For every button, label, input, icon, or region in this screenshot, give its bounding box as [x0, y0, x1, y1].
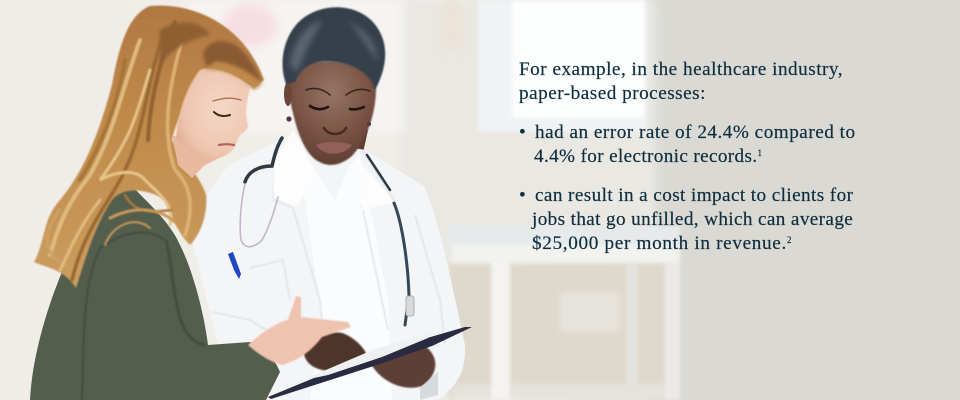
doctor: shirt: [296, 135, 392, 400]
bullet two: •: [519, 185, 526, 206]
doctor: blue pen: [228, 252, 241, 279]
patient: hair strands: [47, 22, 190, 280]
patient: green sweater: [30, 182, 280, 400]
doctor: left collar: [274, 130, 318, 206]
bullet one continuation: 4.4% for electronic records.1: [534, 146, 762, 167]
background: white table: [450, 226, 680, 400]
doctor: face: [288, 61, 376, 165]
patient: sweater shading: [82, 232, 205, 400]
text block: paper-based process facts: [519, 59, 856, 254]
patient: hair mass: [34, 6, 264, 288]
intro text: For example, in the healthcare industry,: [519, 59, 843, 80]
background: bright window: [478, 0, 646, 132]
text block: paper-based process facts: had an error rate of 24.4% compared to: [535, 122, 856, 143]
patient: dark crown and fringe: [160, 22, 262, 90]
doctor: eyes, brows, nose, mouth: [306, 88, 370, 154]
intro text line two: paper-based processes:: [519, 83, 706, 104]
doctor: short curly hair: [283, 7, 385, 90]
background: beige cabinet behind table: [448, 262, 677, 400]
bullet two last line: $25,000 per month in revenue.2: [532, 233, 792, 254]
text block: paper-based process facts: can result in a cost impact to clients for: [535, 185, 853, 206]
patient: [30, 6, 351, 400]
doctor: [193, 7, 465, 400]
clipboard: [268, 327, 472, 399]
doctor: coat folds: [212, 150, 445, 345]
doctor: sleeve: [420, 372, 438, 400]
bullet two: [519, 185, 853, 206]
doctor: white coat: [193, 136, 465, 400]
doctor: ear and earrings: [284, 82, 371, 126]
patient: eye, brow, lips: [213, 98, 241, 145]
bullet one: [519, 122, 856, 143]
doctor: stethoscope: [240, 138, 414, 325]
bullet one: •: [519, 122, 526, 143]
patient: face: [176, 68, 250, 158]
patient: hand: [248, 296, 351, 365]
doctor: right collar: [356, 157, 394, 210]
doctor: neck: [300, 130, 368, 205]
patient: neck: [172, 135, 225, 178]
bullet two continuation: jobs that go unfilled, which can average: [532, 209, 853, 230]
doctor: hands: [304, 332, 368, 371]
background: wall poster: [185, 0, 461, 132]
